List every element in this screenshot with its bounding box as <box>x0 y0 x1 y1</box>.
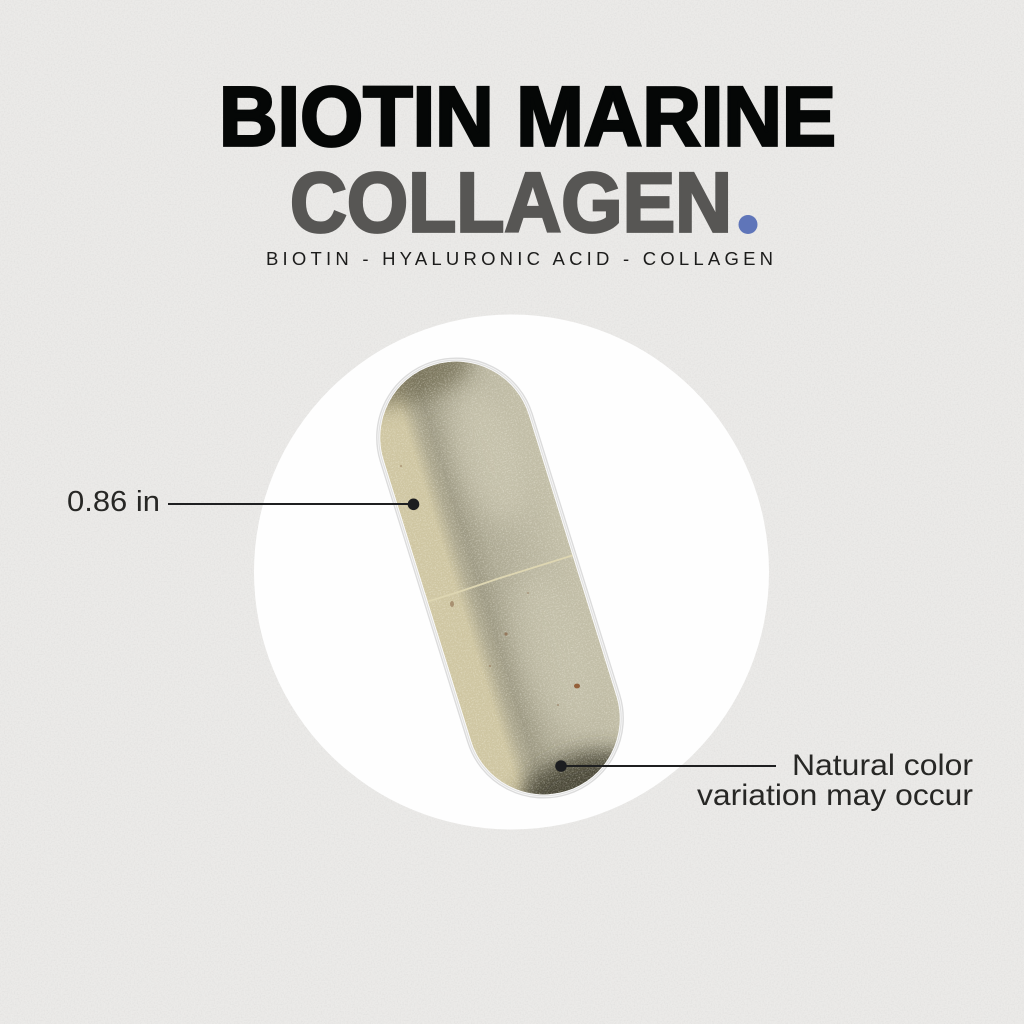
light powder patch upper half <box>448 396 518 518</box>
callout leader line <box>561 765 776 767</box>
callout marker <box>555 760 567 772</box>
title <box>219 70 836 250</box>
subtitle: BIOTIN - HYALURONIC ACID - COLLAGEN <box>266 248 773 269</box>
title line: Collagen: COLLAGEN <box>290 156 732 250</box>
capsule <box>376 358 624 798</box>
white circle backdrop <box>254 314 769 830</box>
callout: capsule length <box>67 486 419 518</box>
callout marker <box>408 498 419 510</box>
callout: colour variation <box>555 749 973 812</box>
capsule specks <box>400 465 580 706</box>
title accent dot <box>738 215 758 234</box>
callout label: 0.86 in <box>67 486 160 518</box>
capsule shell outline <box>357 338 643 818</box>
title line: Biotin Marine: BIOTIN MARINE <box>219 70 836 164</box>
light powder patch lower half <box>516 586 583 726</box>
callout label line 1: Natural color <box>792 749 973 782</box>
dark shading top end <box>384 362 480 417</box>
infographic canvas <box>68 85 972 830</box>
capsule seam <box>427 555 573 602</box>
dark shading bottom end <box>510 736 616 794</box>
capsule powder fill <box>380 362 620 794</box>
callout label line 2: variation may occur <box>697 779 973 812</box>
callout leader line <box>168 503 413 505</box>
